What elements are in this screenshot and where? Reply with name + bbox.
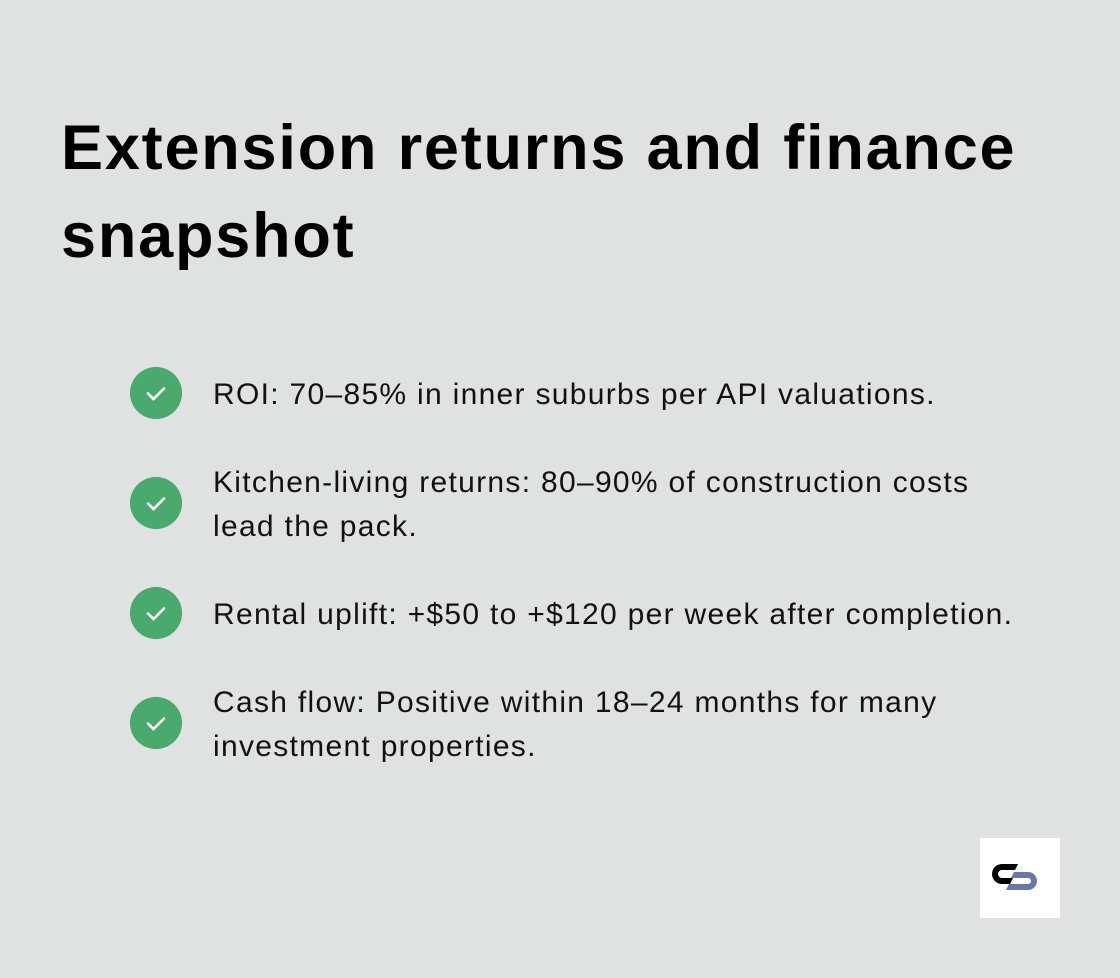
icon: check xyxy=(130,587,182,639)
title: Extension returns and finance snapshot xyxy=(61,113,1016,271)
logo xyxy=(980,838,1060,918)
item: rental uplift: Rental uplift: +$50 to +$120 per week after completion. xyxy=(213,598,1013,631)
icon: check xyxy=(130,477,182,529)
icon: check xyxy=(130,367,182,419)
icon: check xyxy=(130,697,182,749)
item: rental uplift xyxy=(130,587,1013,639)
item: ROI: ROI: 70–85% in inner suburbs per API valuations. xyxy=(213,378,936,411)
item: cash flow: Cash flow: Positive within 18–24 months for many investment properties. xyxy=(213,686,937,763)
item: ROI xyxy=(130,367,936,419)
item: kitchen-living: Kitchen-living returns: 80–90% of construction costs lead the pack. xyxy=(213,466,969,543)
